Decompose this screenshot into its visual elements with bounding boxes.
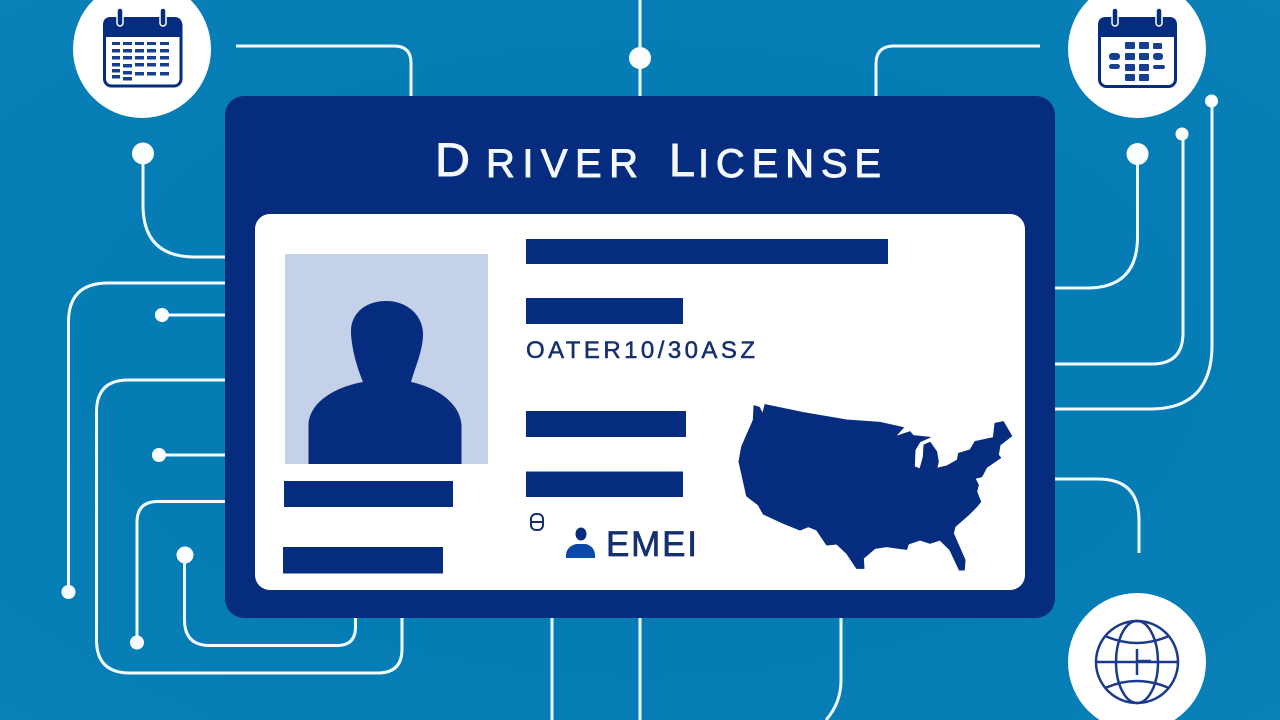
- dot: left outer: [62, 585, 76, 599]
- text: date line: OATER10/30ASZ: [526, 337, 755, 364]
- line: bottom connector three: [826, 618, 841, 720]
- line: bottom connector two: [638, 618, 642, 720]
- dot: top center: [629, 47, 651, 69]
- connector dots: [62, 47, 1218, 650]
- line: left upper connector: [143, 153, 225, 257]
- bar: name line two: [526, 298, 683, 324]
- line: top center connector: [638, 0, 642, 96]
- line: left outer connector: [68, 283, 225, 592]
- panel: card body: [255, 214, 1025, 590]
- line: right inner connector: [1055, 154, 1138, 288]
- panel: license card: [225, 96, 1055, 618]
- dot: left short one: [155, 308, 169, 322]
- line: left inner connector: [184, 555, 356, 646]
- bar: detail line one: [526, 411, 686, 437]
- line: right outer connector: [1055, 101, 1212, 409]
- line: right lower connector: [1055, 479, 1139, 553]
- icon: small person: [566, 528, 595, 558]
- dot: left inner: [176, 546, 194, 564]
- map: United States: [739, 405, 1012, 570]
- icon: globe: [1068, 593, 1206, 720]
- line: right middle connector: [1055, 134, 1183, 364]
- title: D: [435, 133, 470, 186]
- dot: right inner: [1126, 143, 1148, 165]
- icon: person silhouette: [308, 301, 462, 464]
- title: ICENSE: [698, 142, 881, 186]
- icon: calendar left: [73, 0, 211, 118]
- title: RIVER: [486, 142, 638, 186]
- title: [435, 133, 881, 186]
- dot: left lower: [130, 636, 144, 650]
- dot: left short two: [152, 448, 166, 462]
- title: L: [669, 134, 695, 186]
- line: top left connector: [236, 46, 411, 96]
- bar: photo caption one: [284, 481, 453, 507]
- icon: small glyph: [531, 514, 543, 530]
- icon: calendar right: [1068, 0, 1206, 118]
- line: top right connector: [876, 46, 1040, 96]
- line: left short connector two: [159, 454, 225, 456]
- line: bottom connector one: [550, 618, 554, 720]
- dot: right middle: [1176, 128, 1188, 140]
- bar: detail line two: [526, 472, 683, 497]
- line: left lower connector: [137, 502, 225, 642]
- photo placeholder: [285, 254, 488, 464]
- line: left short connector one: [162, 314, 225, 316]
- text: signature: EMEI: [606, 525, 697, 564]
- bar: name line one: [526, 239, 888, 264]
- dot: right outer: [1205, 94, 1218, 108]
- dot: left upper: [132, 142, 154, 164]
- line: left wrap connector: [96, 380, 402, 673]
- bar: photo caption two: [283, 547, 443, 574]
